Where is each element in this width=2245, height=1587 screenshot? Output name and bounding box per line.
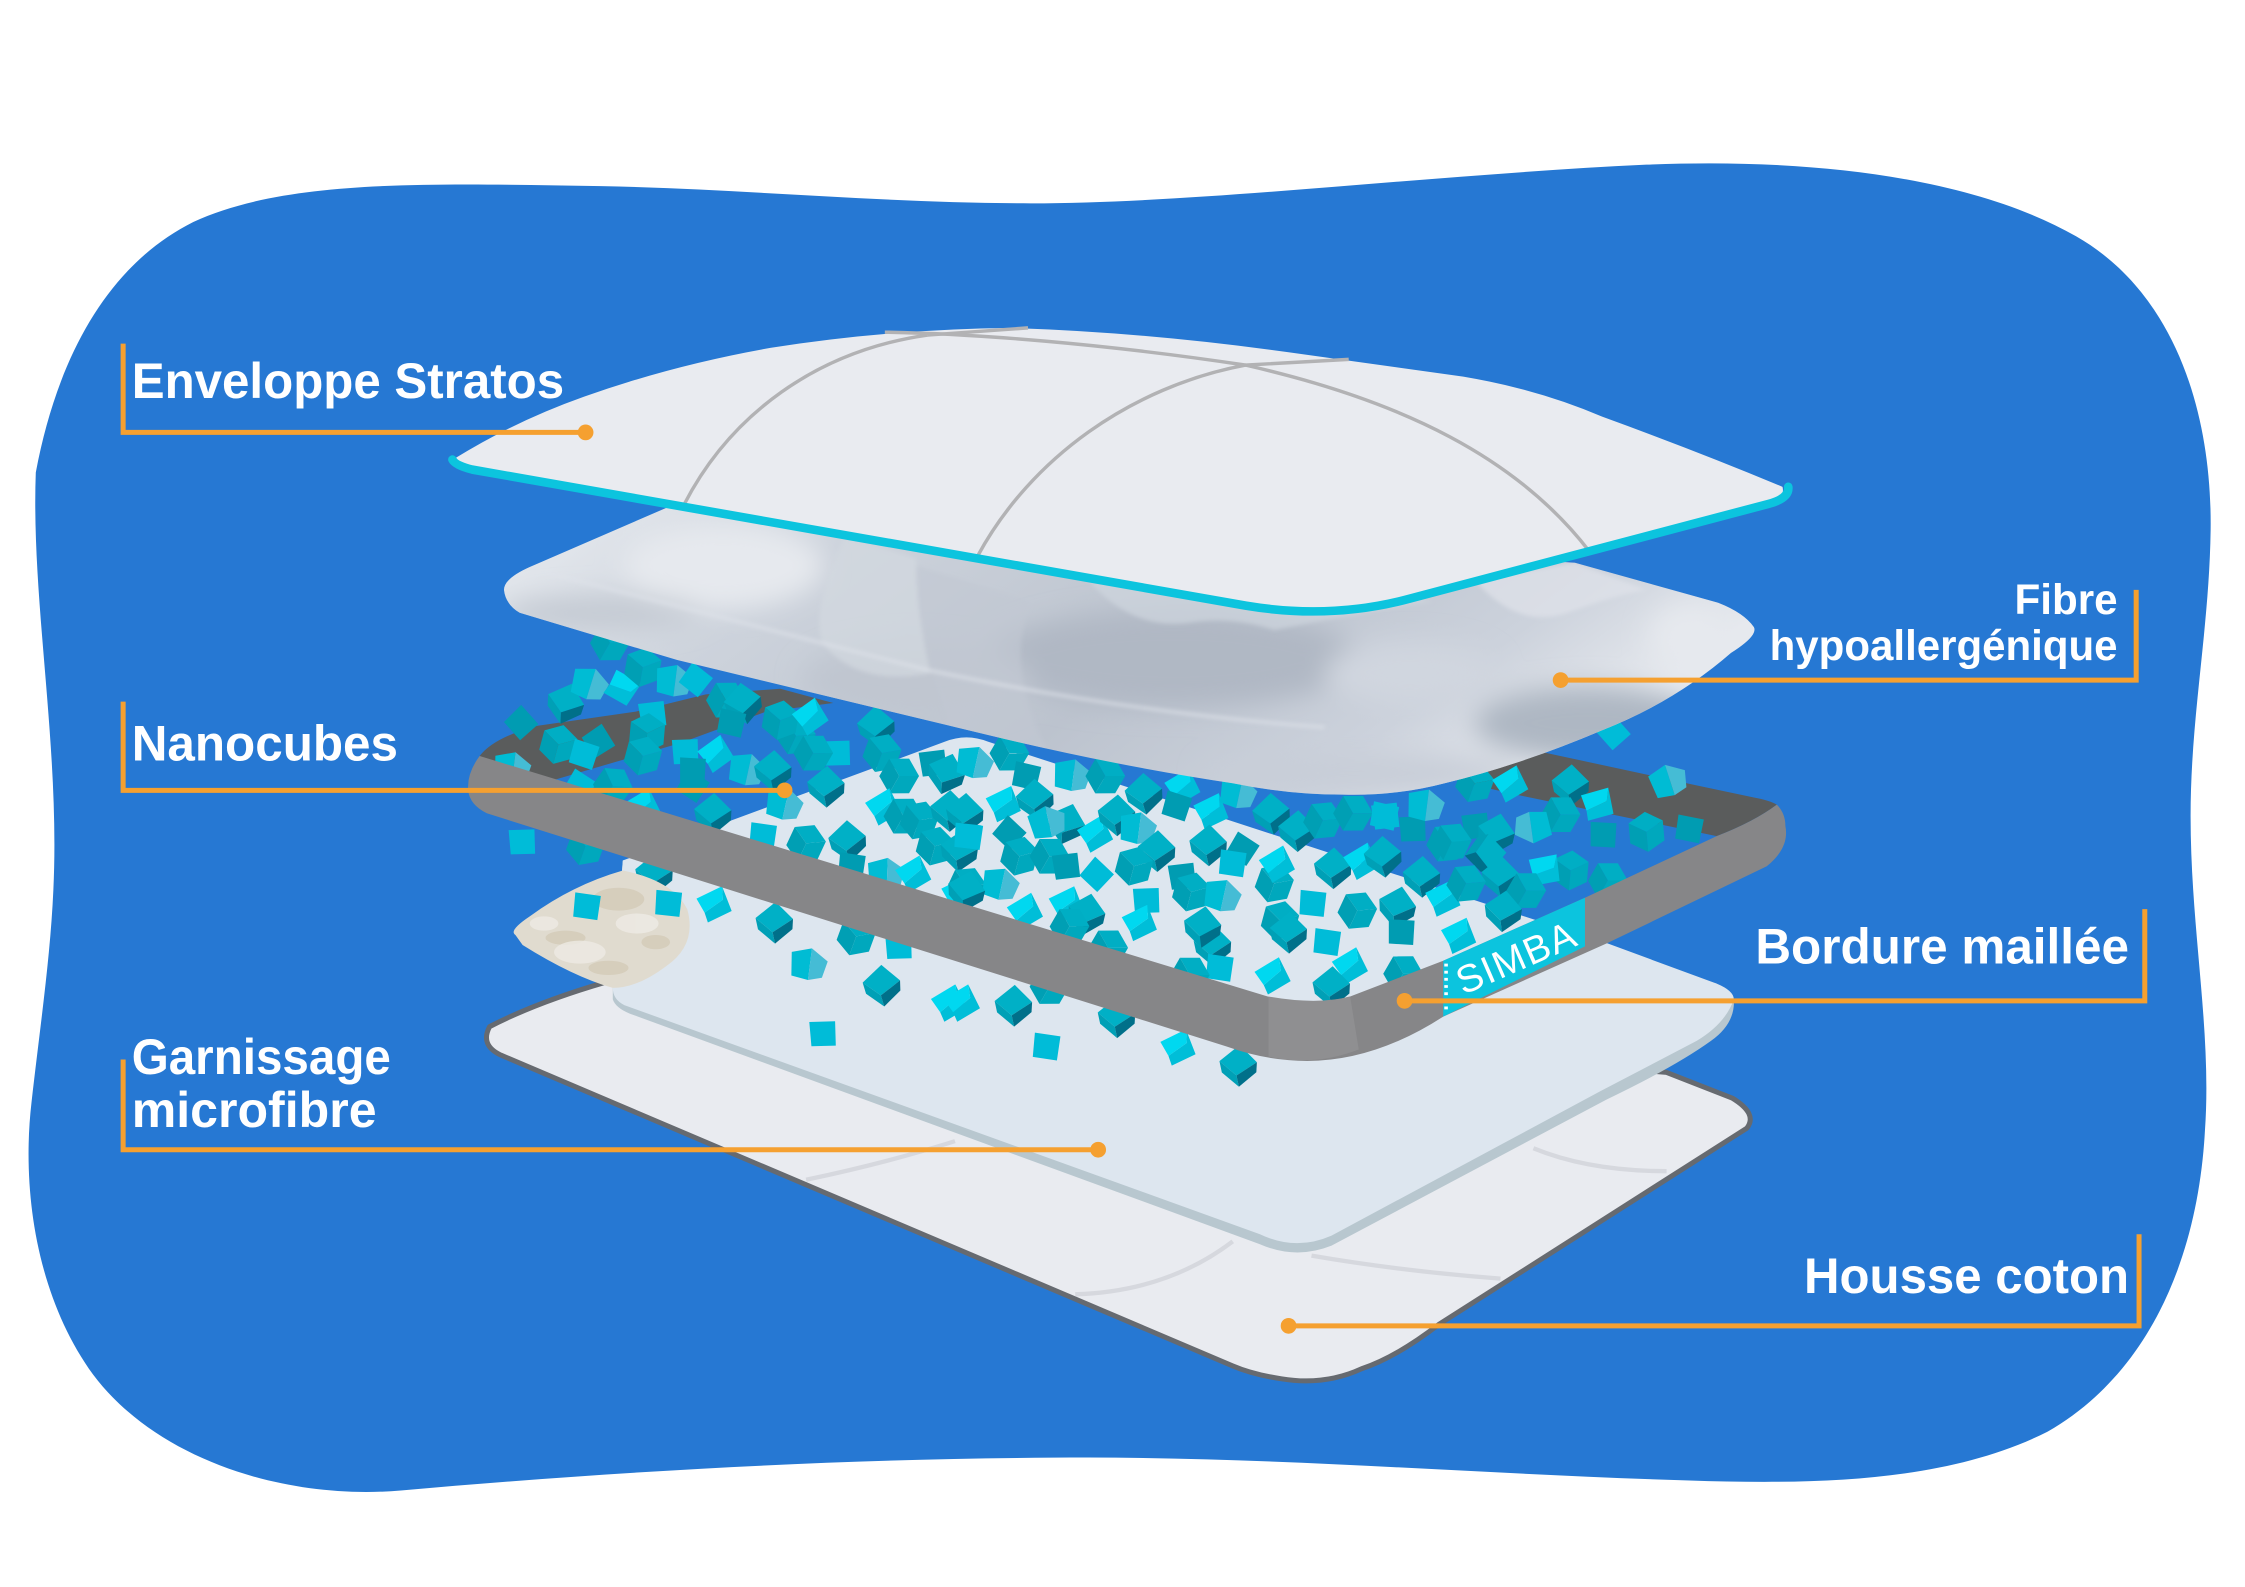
label: Garnissage microfibre: microfibre (132, 1082, 377, 1138)
label: Enveloppe Stratos: Enveloppe Stratos (132, 353, 564, 409)
layer: mesh border back walls (480, 689, 1777, 836)
cover seams (806, 1141, 1667, 1294)
label: Nanocubes (123, 702, 792, 798)
nanocubes: upper cluster (489, 617, 1704, 1010)
label: Housse coton (1281, 1234, 2139, 1334)
label: Housse coton: Housse coton (1804, 1248, 2129, 1304)
layer: Stratos envelope (452, 328, 1788, 611)
label: Bordure maillée (1397, 909, 2145, 1009)
layer: microfibre sheet (613, 737, 1734, 1252)
layer: hypoallergenic fibre (504, 508, 1754, 795)
layer: mesh border front (468, 756, 1786, 1061)
fibre shading (501, 523, 1730, 793)
label: Nanocubes: Nanocubes (132, 715, 398, 771)
cubes on the filling (573, 892, 601, 920)
cube on the filling (655, 890, 682, 917)
label: Garnissage microfibre (123, 1029, 1106, 1158)
label: Fibre hypoallergénique: Fibre (2014, 576, 2118, 624)
label: Fibre hypoallergénique (1553, 576, 2136, 688)
label: Fibre hypoallergénique: hypoallergénique (1770, 622, 2118, 670)
fibre lobes (798, 562, 1634, 749)
layer: microfibre filling (beige) (514, 871, 690, 988)
label: Enveloppe Stratos (123, 344, 593, 440)
nanocubes: falling below the frame (509, 828, 1259, 1088)
label: Garnissage microfibre: Garnissage (132, 1029, 391, 1085)
layer: cotton cover (486, 982, 1750, 1381)
envelope seams (684, 328, 1589, 556)
label: Bordure maillée: Bordure maillée (1755, 919, 2129, 975)
envelope rim (452, 460, 1788, 611)
SIMBA tag: SIMBA (1450, 914, 1583, 1003)
